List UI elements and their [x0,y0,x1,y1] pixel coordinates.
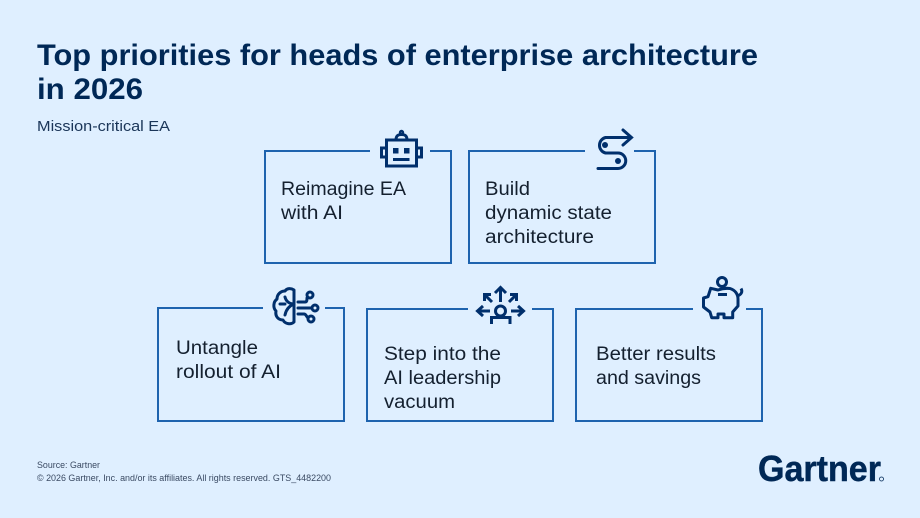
panel: Untangle rollout of AI [158,289,344,421]
text [384,344,501,413]
text [485,179,612,248]
title [37,39,758,106]
text [596,344,716,389]
text: architecture [485,227,594,248]
title: Top priorities for heads of enterprise architecture [37,39,758,72]
text: rollout of AI [176,362,281,383]
icon: piggy bank [704,278,742,318]
text: AI leadership [384,368,501,389]
icon: winding path arrow [598,130,632,168]
logo: Gartner: Gartner [758,448,881,489]
text: Step into the [384,344,501,365]
text: and savings [596,368,701,389]
text: Untangle [176,338,258,359]
title: in 2026 [37,73,143,106]
panel: Better results and savings [576,278,762,421]
icon: brain circuit [274,289,318,324]
source and copyright [37,460,331,483]
source and copyright: Source: Gartner [37,460,100,470]
text: dynamic state [485,203,612,224]
text [176,338,281,383]
panel: Step into the AI leadership vacuum [367,288,553,421]
icon: robot [382,131,422,166]
text: vacuum [384,392,455,413]
text: with AI [280,203,343,224]
text: Reimagine EA [281,179,406,200]
subtitle: Mission-critical EA [37,119,170,135]
panel: Reimagine EA with AI [265,131,451,263]
text: Better results [596,344,716,365]
text [280,179,406,224]
source and copyright: © 2026 Gartner, Inc. and/or its affiliates. All rights reserved. GTS_4482200 [37,473,331,483]
panel: Build dynamic state architecture [469,130,655,263]
text: Build [485,179,530,200]
icon: person with radiating arrows [478,288,524,324]
